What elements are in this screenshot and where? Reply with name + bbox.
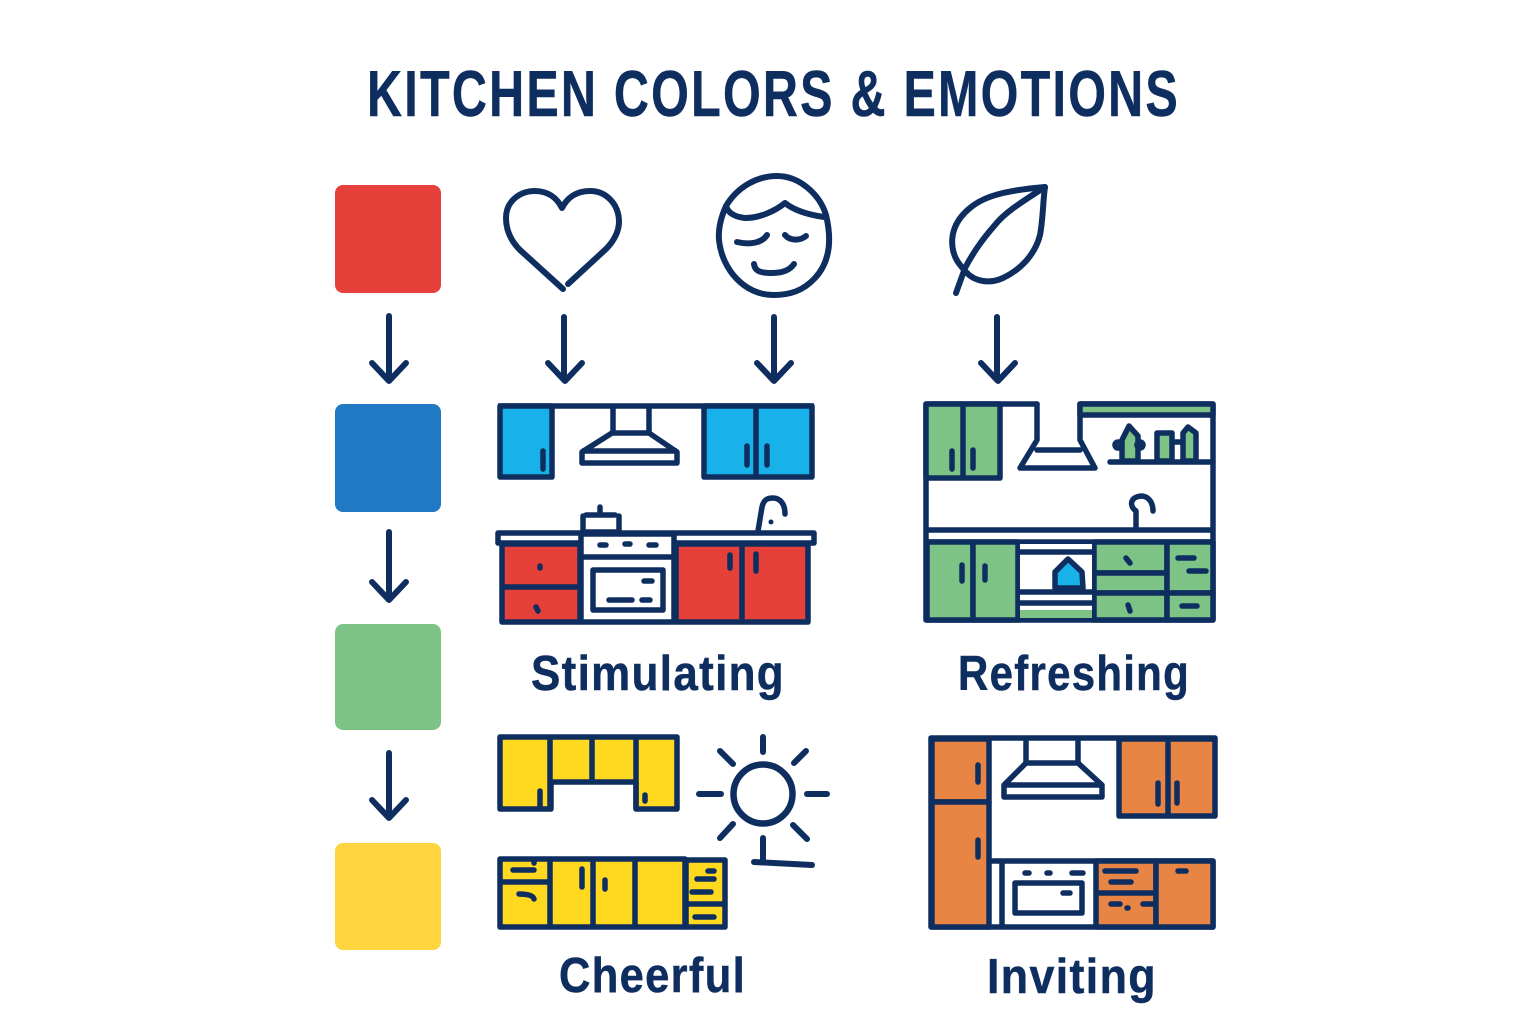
oven niche with blue icon	[1018, 544, 1094, 618]
icon: heart	[506, 191, 619, 289]
color swatch column	[335, 185, 441, 950]
panel: refreshing kitchen	[926, 404, 1213, 620]
counter top	[498, 533, 814, 543]
lower cabinets in orange	[1096, 861, 1213, 927]
icon: calm face	[719, 176, 829, 295]
swatch: red	[335, 185, 441, 293]
range hood	[1004, 738, 1102, 797]
label: cheerful: Cheerful	[559, 949, 746, 1003]
swatch: blue	[335, 404, 441, 512]
upper cabinets in yellow	[500, 737, 677, 809]
oven	[1002, 861, 1083, 927]
range hood	[1020, 404, 1095, 468]
upper right cabinet in orange	[1119, 739, 1215, 816]
upper cabinet in green	[926, 404, 1000, 478]
lower cabinets in yellow	[500, 859, 725, 927]
frame	[931, 738, 1215, 927]
arrow: red to blue	[372, 316, 406, 381]
panel: inviting kitchen	[931, 738, 1215, 927]
arrow: leaf to kitchen	[981, 317, 1015, 381]
title: KITCHEN COLORS & EMOTIONS	[367, 57, 1180, 130]
counter	[926, 530, 1213, 542]
faucet	[1132, 496, 1153, 528]
walls and top frame	[926, 404, 1213, 620]
panel: stimulating kitchen	[498, 406, 814, 622]
arrow: face to kitchen	[757, 317, 791, 381]
lower cabinets in red	[502, 544, 808, 622]
panel: cheerful kitchen	[500, 737, 725, 927]
tall cabinets in orange	[932, 739, 989, 927]
arrow: green to yellow	[372, 753, 406, 818]
label: inviting: Inviting	[987, 950, 1157, 1004]
faucet	[758, 498, 785, 531]
shelf with plant and bottles	[1110, 426, 1213, 462]
label: refreshing: Refreshing	[958, 647, 1190, 701]
upper cabinets and hood	[498, 406, 814, 477]
stove and oven	[581, 534, 674, 622]
pot on stove	[583, 507, 619, 532]
label: stimulating: Stimulating	[531, 647, 785, 701]
arrow: heart to kitchen	[548, 317, 582, 381]
top shelf band	[1080, 404, 1213, 415]
swatch: green	[335, 624, 441, 730]
icon: sun	[699, 737, 827, 865]
icon: leaf	[952, 187, 1045, 293]
swatch: yellow	[335, 843, 441, 950]
lower cabinets in green	[927, 542, 1213, 620]
arrow: blue to green	[372, 532, 406, 600]
